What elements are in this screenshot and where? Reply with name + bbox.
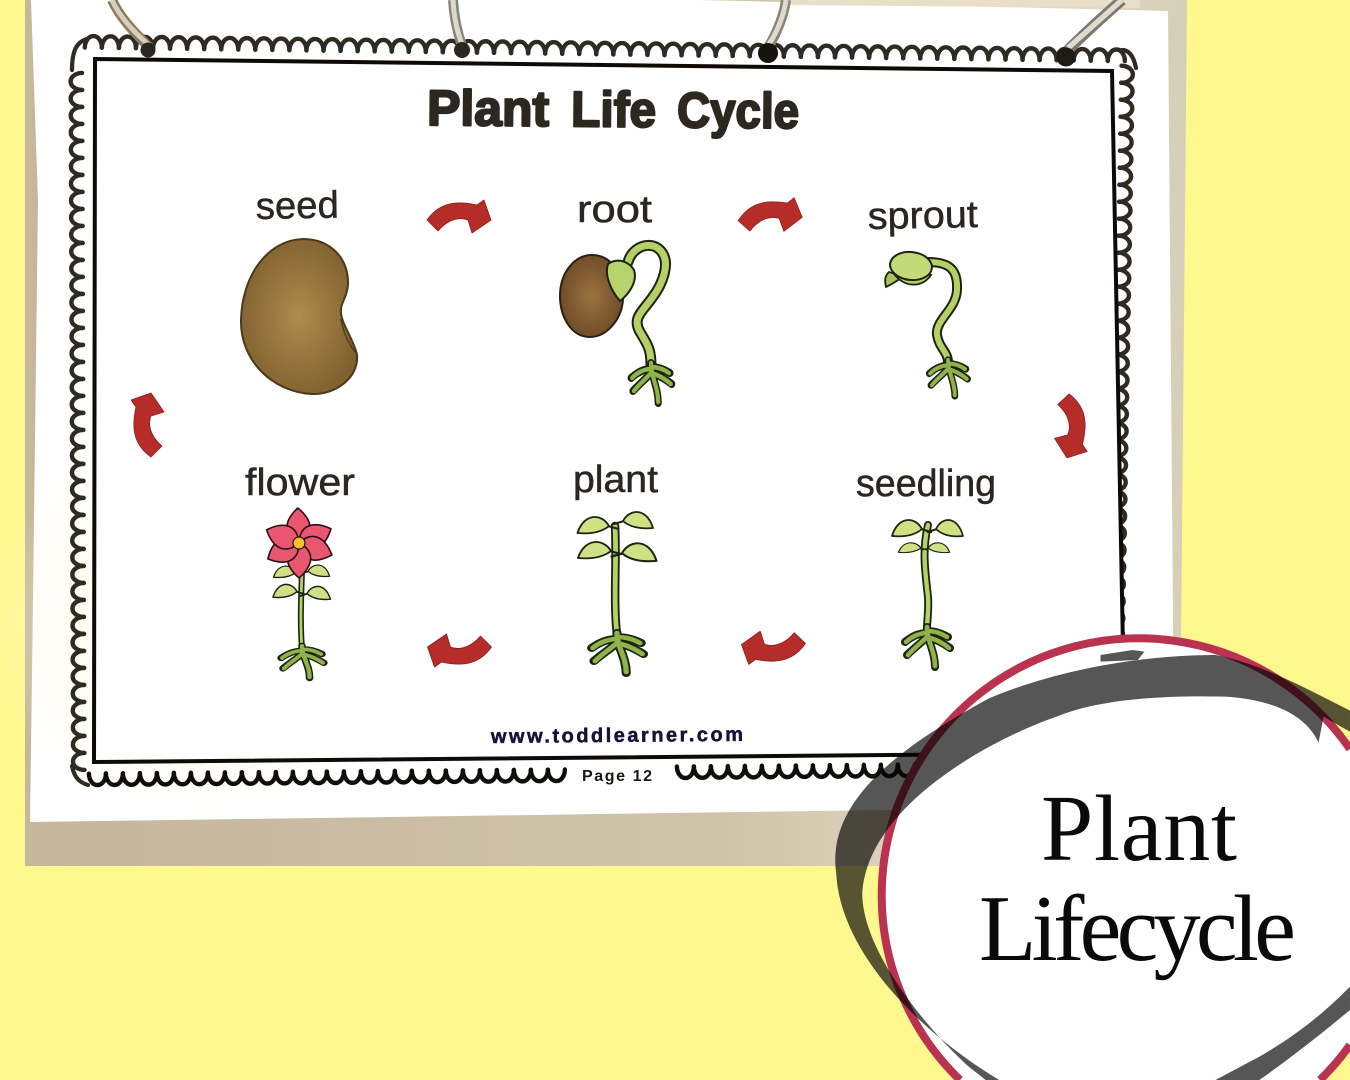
title	[427, 80, 799, 139]
page number: Page 12	[582, 768, 652, 785]
binder ring 1	[112, 0, 156, 58]
label: seedling: seedling	[856, 463, 996, 505]
binder top bar	[790, 0, 1140, 8]
arrow: plant to flower	[428, 634, 492, 667]
binder ring 3	[758, 0, 786, 63]
binder paper sheet	[30, 0, 1176, 822]
arrow: root to sprout	[737, 197, 803, 234]
scalloped page border	[71, 36, 1136, 785]
label: root: root	[577, 189, 653, 231]
label: plant: plant	[573, 459, 658, 501]
arrow: sprout to seedling	[1054, 393, 1089, 459]
title: Life	[571, 81, 656, 138]
icon: flower	[262, 508, 336, 678]
icon: root	[560, 245, 672, 403]
arrow: flower to seed	[131, 393, 164, 457]
badge title: Lifecycle	[979, 877, 1296, 981]
arrow: seed to root	[427, 200, 491, 233]
icon: sprout	[885, 250, 968, 396]
icon: seedling	[892, 520, 963, 667]
title: Cycle	[677, 82, 799, 139]
icon: seed	[241, 239, 357, 394]
label: seed: seed	[255, 185, 339, 228]
label: flower: flower	[245, 462, 355, 504]
badge red ring	[882, 638, 1350, 1080]
icon: plant	[578, 512, 656, 673]
label: sprout: sprout	[867, 194, 979, 238]
badge circle	[882, 638, 1350, 1080]
binder ring 2	[453, 0, 470, 58]
website url: www.toddlearner.com	[490, 724, 743, 748]
brush stroke ring	[835, 650, 1350, 1080]
arrow: seedling to plant	[741, 630, 806, 665]
title: Plant	[427, 80, 550, 137]
badge title	[979, 777, 1296, 981]
badge title: Plant	[1041, 777, 1237, 881]
warm tint on paper	[0, 430, 420, 810]
inner black frame	[94, 59, 1125, 762]
photo backdrop	[25, 0, 1187, 866]
binder ring 4	[1056, 0, 1122, 66]
